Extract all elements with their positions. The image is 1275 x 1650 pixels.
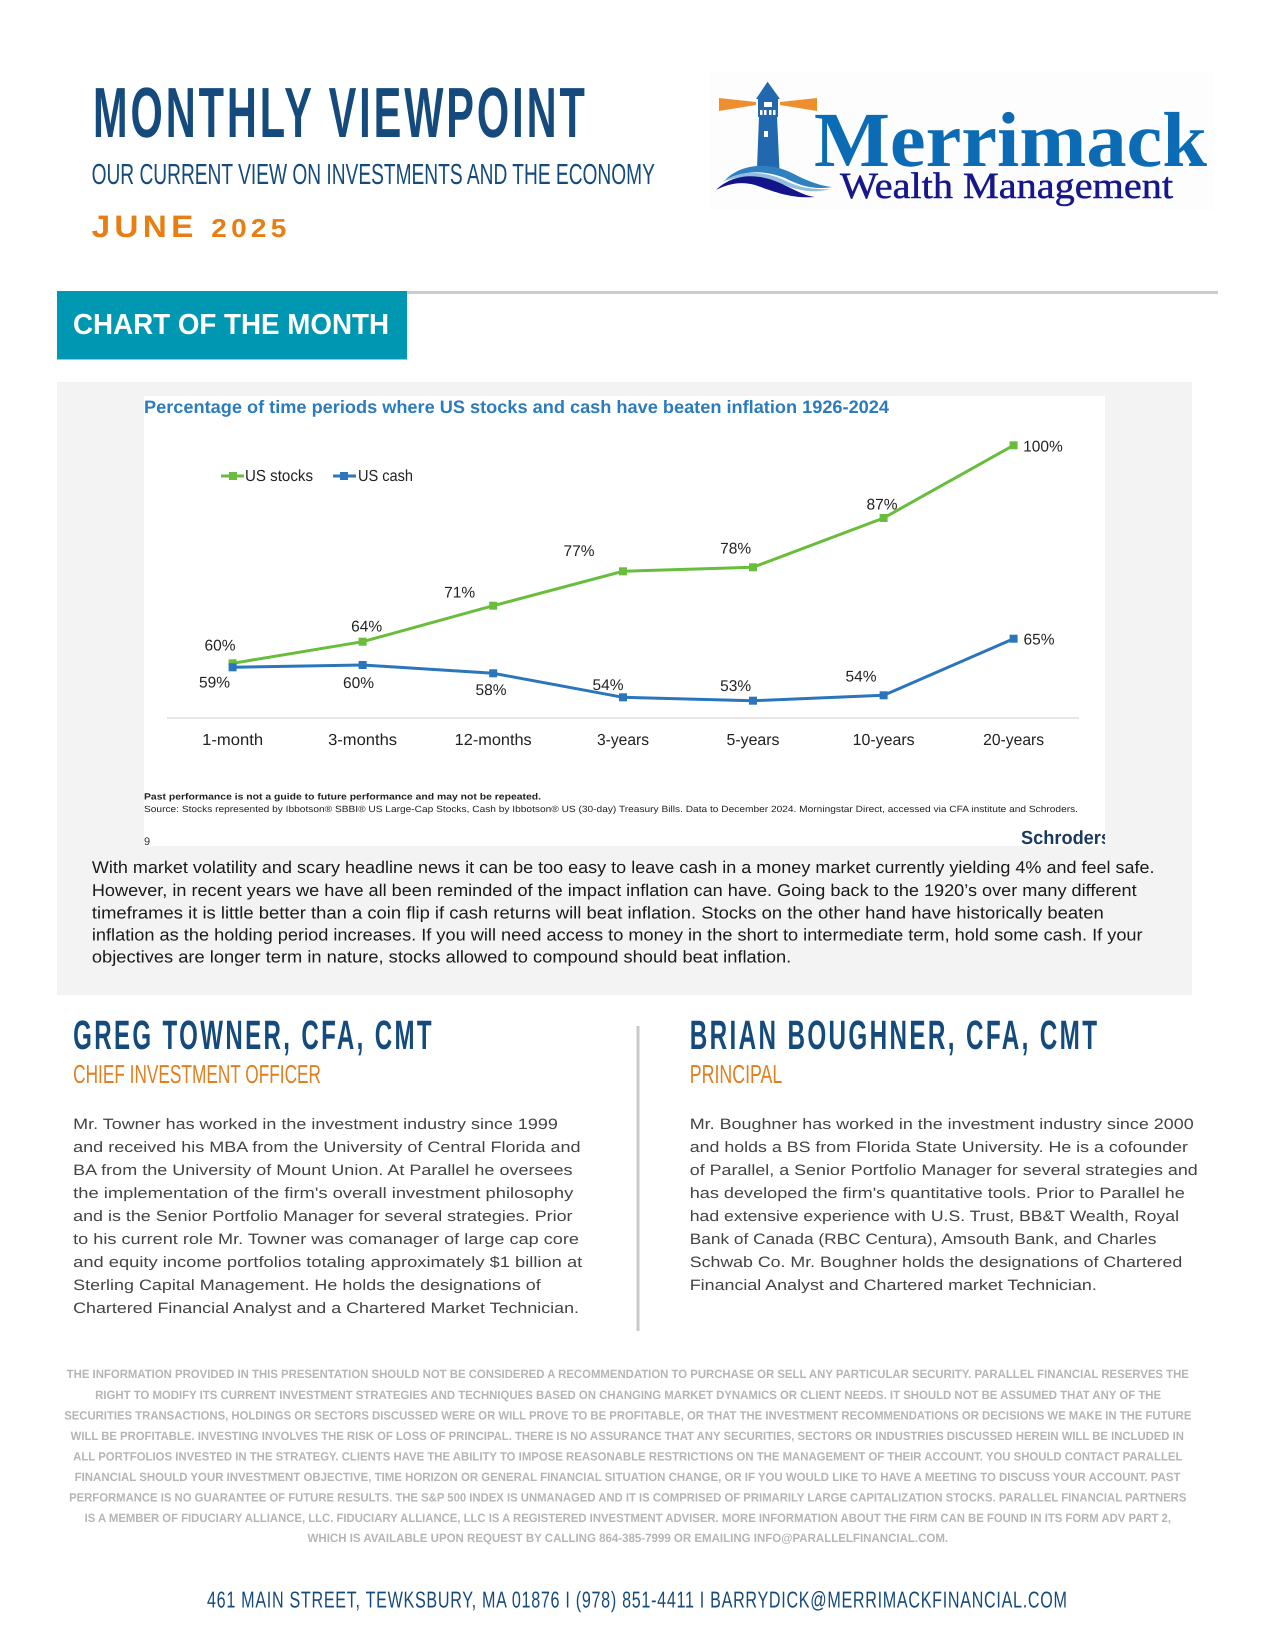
section heading: chart of the month (57, 291, 407, 360)
disclaimer (64, 1367, 1191, 1545)
biography: Bank of Canada (RBC Centura), Amsouth Bank, and Charles (690, 1231, 1156, 1248)
biography: has developed the firm's quantitative tools. Prior to Parallel he (690, 1185, 1185, 1202)
title: MONTHLY VIEWPOINT (93, 74, 588, 153)
legend: US cash (358, 468, 413, 485)
axis labels: 10-years (853, 732, 915, 749)
data labels: 71% (444, 584, 475, 602)
disclaimer: THE INFORMATION PROVIDED IN THIS PRESENTATION SHOULD NOT BE CONSIDERED A RECOMMENDATION TO PURCHASE OR SELL ANY PARTICULAR SECURITY. PARALLEL FINANCIAL RESERVES THE (67, 1367, 1189, 1381)
disclaimer: SECURITIES TRANSACTIONS, HOLDINGS OR SECTORS DISCUSSED WERE OR WILL PROVE TO BE PROFITABLE, OR THAT THE INVESTMENT RECOMMENDATIONS OR DECISIONS WE MAKE IN THE FUTURE (64, 1408, 1191, 1422)
role: PRINCIPAL (690, 1059, 782, 1089)
biography: Chartered Financial Analyst and a Chartered Market Technician. (73, 1300, 579, 1317)
axis labels: 5-years (726, 732, 780, 749)
disclaimer: ALL PORTFOLIOS INVESTED IN THE STRATEGY. CLIENTS HAVE THE ABILITY TO IMPOSE REASONABLE RESTRICTIONS ON THE MANAGEMENT OF THEIR ACCOUNT. YOU SHOULD CONTACT PARALLEL (73, 1450, 1182, 1464)
name: GREG TOWNER, CFA, CMT (73, 1012, 434, 1058)
logo tagline: Wealth Management (840, 166, 1174, 207)
commentary text: With market volatility and scary headline news it can be too easy to leave cash in a money market currently yielding 4% and feel safe. (92, 858, 1155, 877)
legend (221, 469, 412, 482)
data labels: 87% (866, 496, 898, 514)
data labels: 64% (351, 618, 382, 636)
data labels: 77% (563, 543, 595, 560)
biography: of Parallel, a Senior Portfolio Manager for several strategies and (690, 1162, 1198, 1179)
chart footnotes: 9 (144, 836, 150, 848)
biography: Sterling Capital Management. He holds the designations of (73, 1277, 542, 1294)
data labels (199, 438, 1063, 699)
data labels: 59% (199, 674, 230, 692)
axis labels: 3-months (328, 732, 397, 749)
commentary text: timeframes it is little better than a coin flip if cash returns will beat inflation. Stocks on the other hand have historically beaten (92, 903, 1104, 922)
commentary text: However, in recent years we have all been reminded of the impact inflation can have. Going back to the 1920’s over many different (92, 881, 1137, 900)
data labels: 54% (592, 677, 624, 694)
Schroders wordmark: Schroders (1021, 828, 1111, 849)
section heading: chart of the month: CHART OF THE MONTH (73, 309, 389, 341)
data labels: 54% (845, 668, 877, 686)
commentary text: objectives are longer term in nature, stocks allowed to compound should beat inflation. (92, 947, 791, 966)
biography: Financial Analyst and Chartered market Technician. (690, 1277, 1097, 1294)
disclaimer: FINANCIAL SHOULD YOUR INVESTMENT OBJECTIVE, TIME HORIZON OR GENERAL FINANCIAL SITUATION CHANGE, OR IF YOU WOULD LIKE TO HAVE A MEETING TO DISCUSS YOUR ACCOUNT. PAST (75, 1470, 1181, 1484)
bio: Brian Boughner (690, 1012, 1198, 1294)
disclaimer: RIGHT TO MODIFY ITS CURRENT INVESTMENT STRATEGIES AND TECHNIQUES BASED ON CHANGING MARKET DYNAMICS OR CLIENT NEEDS. IT SHOULD NOT BE ASSUMED THAT ANY OF THE (95, 1388, 1161, 1402)
logo: Merrimack Wealth Management (709, 72, 1213, 210)
line chart (144, 396, 1111, 849)
series: US cash (229, 635, 1018, 705)
biography: the implementation of the firm's overall investment philosophy (73, 1185, 574, 1202)
subtitle: OUR CURRENT VIEW ON INVESTMENTS AND THE ECONOMY (92, 159, 655, 191)
icon: lighthouse (716, 82, 832, 197)
chart title: Percentage of time periods where US stocks and cash have beaten inflation 1926-2024 (144, 397, 889, 417)
axis labels (202, 732, 1044, 749)
biography: and equity income portfolios totaling approximately $1 billion at (73, 1254, 583, 1271)
legend: US stocks (245, 468, 313, 485)
disclaimer: IS A MEMBER OF FIDUCIARY ALLIANCE, LLC. FIDUCIARY ALLIANCE, LLC IS A REGISTERED INVESTMENT ADVISER. MORE INFORMATION ABOUT THE FIRM CAN BE FOUND IN ITS FORM ADV PART 2, (85, 1511, 1171, 1525)
role: CHIEF INVESTMENT OFFICER (73, 1059, 321, 1089)
series: US stocks (229, 441, 1018, 667)
section rule (407, 291, 1218, 294)
disclaimer: PERFORMANCE IS NO GUARANTEE OF FUTURE RESULTS. THE S&P 500 INDEX IS UNMANAGED AND IT IS COMPRISED OF PRIMARILY LARGE CAPITALIZATION STOCKS. PARALLEL FINANCIAL PARTNERS (69, 1490, 1186, 1504)
bio: Greg Towner (73, 1012, 583, 1317)
biography: Mr. Boughner has worked in the investment industry since 2000 (690, 1116, 1194, 1133)
data labels: 78% (720, 540, 751, 558)
header: title block (92, 74, 655, 244)
biography: and is the Senior Portfolio Manager for several strategies. Prior (73, 1208, 572, 1225)
biography: Mr. Towner has worked in the investment industry since 1999 (73, 1116, 558, 1133)
biography: had extensive experience with U.S. Trust, BB&T Wealth, Royal (690, 1208, 1179, 1225)
data labels: 58% (475, 682, 507, 699)
disclaimer: WHICH IS AVAILABLE UPON REQUEST BY CALLING 864-385-7999 OR EMAILING INFO@PARALLELFINANCIAL.COM. (308, 1531, 948, 1545)
biography: BA from the University of Mount Union. At Parallel he oversees (73, 1162, 572, 1179)
axis labels: 3-years (597, 732, 649, 749)
axis line (167, 717, 1079, 719)
chart footnotes: Past performance is not a guide to future performance and may not be repeated. (144, 792, 541, 802)
biography (690, 1116, 1198, 1294)
data labels: 100% (1023, 438, 1063, 456)
data labels: 65% (1023, 632, 1055, 648)
data labels: 60% (343, 675, 374, 692)
column divider (636, 1026, 640, 1331)
biography: Schwab Co. Mr. Boughner holds the designations of Chartered (690, 1254, 1182, 1271)
chart footnotes (144, 792, 1078, 848)
data labels: 53% (720, 678, 751, 695)
panel: chart and commentary (57, 382, 1192, 995)
biography: to his current role Mr. Towner was comanager of large cap core (73, 1231, 579, 1248)
commentary text (92, 858, 1155, 966)
logo wordmark: Merrimack (814, 96, 1208, 183)
biography (73, 1116, 583, 1317)
date: JUNE 2025 (92, 209, 291, 244)
biography: and received his MBA from the University of Central Florida and (73, 1139, 581, 1156)
biography: and holds a BS from Florida State University. He is a cofounder (690, 1139, 1188, 1156)
axis labels: 1-month (202, 732, 263, 749)
axis labels: 20-years (983, 732, 1044, 749)
data labels: 60% (204, 638, 236, 654)
disclaimer: WILL BE PROFITABLE. INVESTING INVOLVES THE RISK OF LOSS OF PRINCIPAL. THERE IS NO ASSURANCE THAT ANY SECURITIES, SECTORS OR INDUSTRIES DISCUSSED HEREIN WILL BE INCLUDED IN (71, 1429, 1184, 1443)
chart footnotes: Source: Stocks represented by Ibbotson® SBBI® US Large-Cap Stocks, Cash by Ibbotson® US (30-day) Treasury Bills. Data to December 2024. Morningstar Direct, accessed via CFA institute and Schroders. (144, 804, 1078, 814)
axis labels: 12-months (455, 732, 532, 749)
commentary text: inflation as the holding period increases. If you will need access to money in the short to intermediate term, hold some cash. If your (92, 925, 1143, 944)
